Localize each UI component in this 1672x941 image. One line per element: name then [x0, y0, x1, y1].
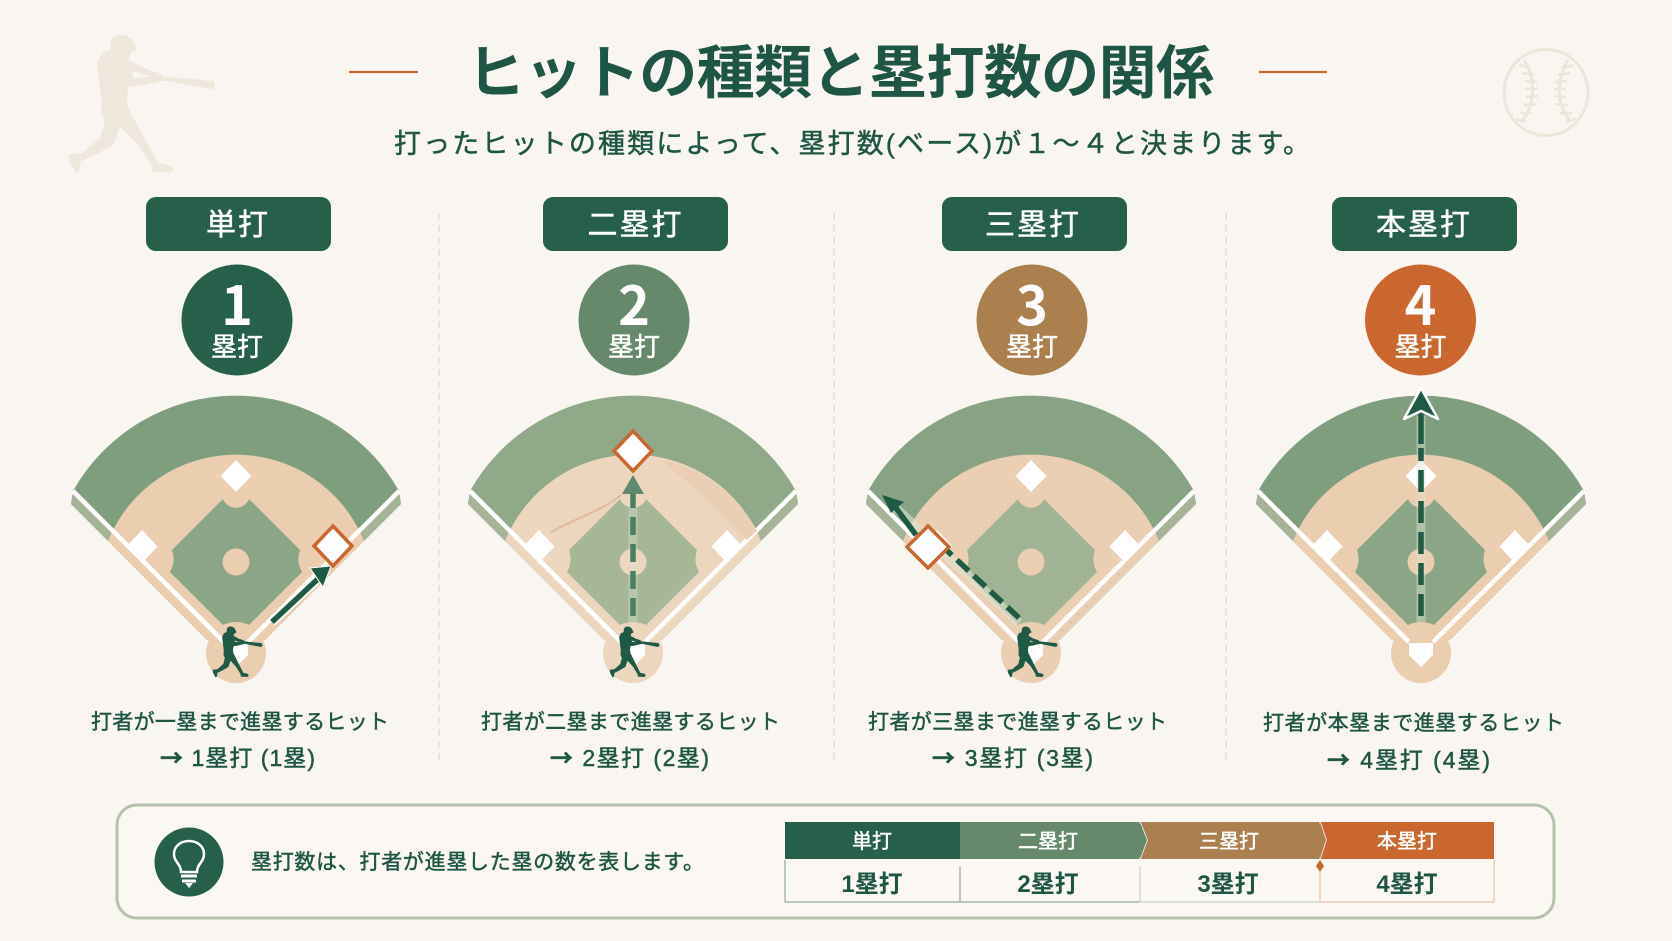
caption: 打者が一塁まで進塁するヒット — [91, 711, 389, 734]
table: hit types to bases: 単打 — [852, 830, 892, 853]
diagram: field with second base — [468, 396, 798, 683]
table: hit types to bases: 3塁打 — [1197, 871, 1259, 898]
panel: single hit — [71, 197, 401, 773]
icon: batter — [1008, 627, 1057, 677]
dividers — [439, 213, 1226, 765]
icon: batter — [213, 627, 262, 677]
arrow: to first base — [272, 566, 331, 622]
heading: triple — [942, 197, 1127, 251]
diagram: field with first base — [71, 396, 401, 683]
table: hit types to bases: 三塁打 — [1199, 830, 1259, 853]
caption: → 1塁打 (1塁) — [160, 739, 315, 773]
caption — [868, 711, 1167, 773]
icon: batter silhouette watermark — [68, 35, 215, 173]
panel: triple — [866, 197, 1196, 773]
caption: → 2塁打 (2塁) — [550, 739, 709, 773]
badge: 3 bases — [976, 262, 1088, 376]
badge: 4 bases: 4 — [1405, 262, 1436, 341]
badge: 2 bases: 塁打 — [608, 332, 660, 362]
caption: 打者が二塁まで進塁するヒット — [481, 711, 780, 734]
panel: summary — [117, 805, 1554, 918]
caption — [1263, 712, 1564, 775]
diagram: field with home plate — [1256, 388, 1586, 683]
table: hit types to bases: 本塁打 — [1377, 830, 1437, 853]
icon: light bulb — [154, 828, 224, 896]
badge: 4 bases: 塁打 — [1394, 332, 1447, 362]
caption: → 4塁打 (4塁) — [1327, 741, 1490, 775]
subtitle: 打ったヒットの種類によって、塁打数(ベース)が１〜４と決まります。 — [394, 129, 1310, 159]
icon: first base highlighted — [314, 526, 352, 566]
badge: 3 bases: 塁打 — [1006, 332, 1058, 362]
panel: double — [468, 197, 798, 773]
table: hit types to bases: 二塁打 — [1018, 830, 1078, 853]
panel: home run — [1256, 197, 1586, 775]
heading: single — [146, 197, 331, 251]
arrow: to second base — [622, 475, 644, 622]
heading: double: 二塁打 — [588, 209, 684, 242]
icon: batter — [610, 627, 659, 677]
table: hit types to bases — [785, 822, 1494, 902]
icon: third base highlighted — [907, 526, 949, 568]
caption: 打者が本塁まで進塁するヒット — [1263, 712, 1564, 735]
arrow: home run — [1404, 388, 1438, 622]
heading: home run — [1332, 197, 1517, 251]
heading: triple: 三塁打 — [985, 209, 1081, 242]
badge: 2 bases — [578, 262, 690, 376]
badge: 2 bases: 2 — [618, 262, 650, 341]
diagram: field with third base — [866, 396, 1196, 683]
badge: 1 base: 塁打 — [211, 332, 263, 362]
badge: 1 base: 1 — [221, 262, 253, 341]
caption: 打者が三塁まで進塁するヒット — [868, 711, 1167, 734]
arrow: to third base — [882, 495, 1019, 623]
heading: double — [543, 197, 728, 251]
icon: baseball watermark — [1504, 50, 1588, 136]
caption — [481, 711, 780, 773]
badge: 4 bases — [1365, 262, 1476, 376]
heading: home run: 本塁打 — [1376, 209, 1472, 242]
badge: 3 bases: 3 — [1016, 262, 1048, 341]
table: hit types to bases: 1塁打 — [841, 871, 903, 898]
icon: second base highlighted — [614, 431, 652, 471]
badge: 1 base — [182, 262, 292, 376]
summary text: 塁打数は、打者が進塁した塁の数を表します。 — [251, 851, 704, 874]
heading: single: 単打 — [206, 209, 270, 242]
caption: → 3塁打 (3塁) — [932, 739, 1093, 773]
table: hit types to bases: 4塁打 — [1376, 871, 1438, 898]
caption — [91, 711, 389, 773]
title: ヒットの種類と塁打数の関係 — [467, 41, 1214, 106]
table: hit types to bases: 2塁打 — [1017, 871, 1079, 898]
